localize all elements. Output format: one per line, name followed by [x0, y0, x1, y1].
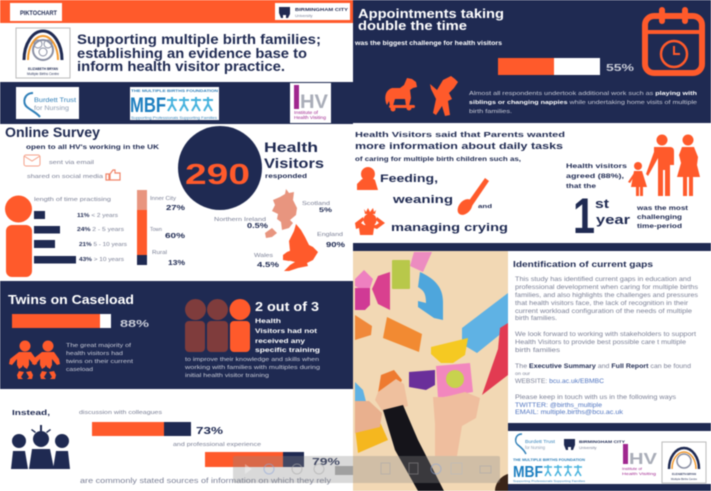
stat: 1st year: [573, 188, 630, 244]
icon: rocking horse: [385, 78, 417, 112]
icon: spoon: [455, 178, 489, 218]
panel: instead: [11, 410, 341, 485]
logo: MBF: Supporting Professionals Supporting Families: [131, 116, 217, 120]
text: most challenging: [636, 206, 688, 230]
text: training detail: [185, 357, 320, 379]
icon: crying: [355, 208, 385, 235]
text: study summary: professional development when caring for multiple births: [515, 285, 698, 291]
stat: 290 health visitors: Health: [264, 139, 318, 155]
icon: family: [628, 134, 700, 196]
text: stakeholders: birth families: [515, 348, 560, 354]
text: contact: [515, 395, 676, 416]
logo: Elizabeth Bryan footer: ELIZABETH BRYAN: [672, 472, 696, 476]
text: sources of information: are commonly stated sources of information on which they rely: [80, 478, 332, 485]
heading: parents wanted: Health Visitors said that Parents wanted: [355, 130, 566, 139]
text: stakeholders: Health Visitors to provide best possible care t multiple: [515, 340, 687, 346]
text: most challenging: time-period: [637, 224, 682, 230]
logo: Elizabeth Bryan Multiple Births Centre: ELIZABETH BRYAN: [28, 67, 58, 71]
text: stakeholders: [515, 332, 696, 354]
text: 2 out of 3: 2 out of 3: [255, 299, 319, 314]
text: 2 out of 3: Health: [255, 319, 281, 325]
bar: 79%: 79%: [312, 456, 341, 468]
map: UK respondents: Northern Ireland: [214, 217, 266, 223]
panel: header: [0, 0, 353, 124]
icon: person: [5, 196, 32, 277]
panel: twins on caseload: [0, 281, 353, 389]
icon: calendar clock: [645, 7, 702, 73]
text: stakeholders: We look forward to working with stakeholders to support: [515, 332, 696, 338]
bar chart: length of time practising: 21% 5 - 10 years: [79, 242, 127, 248]
icon: teddy bear: [430, 76, 458, 116]
icon: email: [24, 155, 40, 166]
text: open to all: open to all HV's working in the UK: [26, 145, 160, 151]
title: inform health visitor practice.: [77, 59, 285, 74]
heading: appointments: double the time: [358, 18, 467, 33]
text: 2 out of 3: specific training: [255, 347, 320, 354]
map: UK respondents: Scotland: [302, 201, 330, 207]
text: study summary: current workload configuration of the needs of multiple: [515, 309, 693, 315]
text: study summary: This study has identified current gaps in education and: [515, 277, 691, 283]
text: additional work: Almost all respondents undertook additional work such as playing with: [469, 91, 698, 97]
text: website: on our: [515, 371, 530, 377]
text: great majority: The great majority of: [66, 343, 132, 349]
map: UK respondents: 4.5%: [257, 262, 280, 269]
title: Supporting multiple birth families;: [77, 32, 321, 47]
logo: Burdett Trust for Nursing: for Nursing: [34, 105, 69, 112]
logo: MBF: THE MULTIPLE BIRTHS FOUNDATION: [131, 88, 218, 93]
text: great majority: health visitors had: [66, 351, 123, 357]
text: most challenging: challenging: [637, 215, 682, 221]
text: sent via email: sent via email: [49, 160, 94, 166]
icon: feeding: [357, 167, 378, 190]
stacked bar: area type: 60%: [165, 233, 186, 240]
stat: 1st year: st: [595, 196, 610, 211]
panel: identification of current gaps: [513, 259, 698, 416]
text: great majority: caseload: [66, 367, 93, 373]
icon: twin babies: [9, 340, 60, 379]
logo: Burdett footer: Burdett Trust: [525, 439, 556, 444]
heading: twins on caseload: Twins on Caseload: [8, 292, 134, 307]
text: feeding: Feeding,: [380, 173, 438, 185]
logo: BCU footer: [564, 439, 625, 450]
logo: iHV: Health Visiting: [294, 115, 327, 120]
heading: appointments: Appointments taking: [358, 6, 504, 21]
stacked bar: area type: Rural: [152, 250, 167, 256]
logo: BCU footer: University: [579, 445, 597, 450]
stacked bar: area type: 13%: [168, 260, 186, 267]
logo: BCU footer: BIRMINGHAM CITY: [579, 439, 625, 444]
text: study summary: birth families.: [515, 316, 557, 322]
bar chart: length of time practising: [34, 211, 127, 264]
text: additional work: siblings or changing nappies while undertaking home visits of multiple: [469, 100, 697, 106]
text: study summary: [515, 277, 698, 322]
text: health visitors agreed: that the: [566, 184, 597, 190]
heading: parents wanted: more information about daily tasks: [355, 141, 563, 152]
logo: Burdett footer: for Nursing: [525, 445, 545, 450]
text: great majority: [66, 343, 134, 373]
text: additional work: [469, 91, 698, 115]
stat: 290 health visitors: [178, 126, 324, 210]
heading: online survey: Online Survey: [5, 125, 100, 140]
text: website: WEBSITE: bcu.ac.uk/EBMBC: [515, 379, 605, 385]
text: website: The Executive Summary and Full Report can be found: [515, 364, 691, 370]
logo: MBF footer: Supporting Professionals Supporting Families: [513, 479, 586, 483]
bar chart: length of time practising: 24% 2 - 5 years: [77, 227, 125, 233]
logo: Burdett Trust for Nursing: [16, 87, 79, 119]
stat: 1st year: 1: [573, 188, 595, 244]
logo: iHV footer: Institute of: [622, 466, 643, 471]
text: biggest challenge: was the biggest challenge for health visitors: [354, 41, 503, 47]
logo: Elizabeth Bryan Multiple Births Centre: [16, 28, 70, 78]
text: contact: TWITTER: @births_multiple: [515, 403, 603, 409]
overlay: viewer toolbar: [233, 456, 500, 483]
stat: 1st year: year: [596, 212, 630, 227]
logo: Burdett footer: [516, 434, 556, 454]
text: website: [515, 364, 691, 385]
text: great majority: twins on their current: [66, 359, 134, 365]
map: UK respondents: Wales: [254, 253, 273, 259]
text: training detail: to improve their knowledge and skills when: [185, 357, 319, 363]
text: training detail: working with families with multiples during: [185, 365, 320, 371]
logo: Elizabeth Bryan footer: Multiple Births Centre: [671, 477, 697, 481]
map: UK respondents: 5%: [319, 207, 332, 214]
text: health visitors agreed: Health visitors: [566, 164, 628, 170]
text: professional experience: and professional experience: [173, 442, 261, 448]
icon: thumbs up: [106, 170, 120, 180]
title: establishing an evidence base to: [77, 46, 307, 61]
logo: Piktochart: [10, 3, 62, 21]
stacked bar: area type: Town: [150, 227, 162, 233]
logo: iHV: Institute of: [294, 110, 319, 115]
logo: Birmingham City University: University: [295, 13, 313, 18]
text: training detail: initial health visitor training: [185, 373, 269, 379]
stacked bar: area type: [137, 190, 186, 267]
logo: MBF footer: [513, 458, 586, 483]
stat: 290 health visitors: responded: [265, 174, 307, 180]
bar: 55%: [498, 58, 635, 75]
text: additional work: birth families.: [469, 109, 513, 115]
map: UK respondents: England: [317, 232, 343, 238]
logo: iHV footer: HV: [629, 451, 657, 468]
panel: parents wanted information: [353, 130, 711, 251]
text: weaning: weaning: [392, 194, 453, 206]
text: contact: EMAIL: multiple.births@bcu.ac.uk: [515, 410, 624, 416]
logo: iHV: HV: [300, 92, 328, 113]
logo: Elizabeth Bryan footer: [662, 442, 706, 483]
logo: MBF footer: THE MULTIPLE BIRTHS FOUNDATION: [513, 458, 586, 462]
text: 2 out of 3: [255, 299, 320, 354]
heading: appointments: [358, 6, 504, 33]
bar chart: length of time practising: 43% > 10 years: [79, 257, 125, 263]
text: 2 out of 3: received any: [255, 338, 305, 345]
text: discussion with colleagues: discussion with colleagues: [79, 410, 162, 416]
stacked bar: area type: 27%: [166, 205, 186, 212]
text: instead: Instead,: [12, 410, 50, 417]
logo: MBF: [130, 87, 219, 120]
text: study summary: that health visitors face, the lack of recognition in their: [515, 301, 688, 307]
panel: footer logos: [508, 423, 711, 491]
logo: Piktochart: PIKTOCHART: [20, 11, 57, 17]
panel: online survey: [5, 125, 346, 277]
bar: 88%: 88%: [120, 318, 150, 330]
bar: 79%: [205, 452, 341, 468]
logo: MBF footer: MBF: [513, 464, 543, 481]
text: and: and: [478, 204, 492, 210]
bar: 73%: 73%: [196, 425, 224, 437]
text: managing crying: managing crying: [391, 222, 508, 234]
heading: identification: Identification of current gaps: [513, 259, 653, 269]
text: health visitors agreed: agreed (88%),: [566, 174, 624, 180]
title: [77, 32, 321, 74]
text: most challenging: was the most: [636, 206, 688, 212]
text: study summary: families, and also highlights the challenges and pressures: [515, 293, 698, 299]
stacked bar: area type: Inner City: [150, 196, 176, 202]
logo: MBF: MBF: [130, 94, 166, 117]
icon: group of colleagues: [11, 425, 70, 469]
icon: 2 of 3 people: [185, 299, 250, 352]
text: health visitors agreed: [566, 164, 628, 190]
heading: parents wanted: of caring for multiple birth children such as,: [355, 157, 521, 163]
text: contact: Please keep in touch with us in the following ways: [515, 395, 676, 401]
map: UK respondents: 90%: [326, 242, 346, 249]
stat: 290 health visitors: 290: [185, 159, 250, 191]
text: length of time practising: length of time practising: [34, 197, 111, 203]
bar: 55%: 55%: [606, 62, 635, 74]
map: UK respondents: 0.5%: [247, 223, 269, 230]
logo: Birmingham City University: [275, 3, 350, 20]
photo: children playing with blocks: [353, 251, 508, 491]
bar chart: length of time practising: 11% < 2 years: [77, 213, 118, 219]
logo: Elizabeth Bryan Multiple Births Centre: Multiple Births Centre: [27, 72, 59, 76]
panel: appointments: [353, 0, 711, 123]
bar: 73%: [92, 422, 224, 437]
text: 2 out of 3: Visitors had not: [255, 328, 318, 335]
logo: iHV footer: Health Visiting: [622, 471, 656, 476]
text: shared on social media: shared on social media: [27, 174, 104, 180]
stat: 290 health visitors: Visitors: [264, 155, 324, 171]
bar: 88%: [12, 314, 150, 330]
logo: Burdett Trust for Nursing: Burdett Trust: [34, 97, 76, 104]
logo: Birmingham City University: BIRMINGHAM CITY: [295, 7, 348, 12]
heading: parents wanted: [355, 130, 566, 163]
logo: iHV: [290, 83, 331, 123]
logo: iHV footer: [622, 444, 657, 476]
map: UK respondents: [214, 189, 346, 271]
